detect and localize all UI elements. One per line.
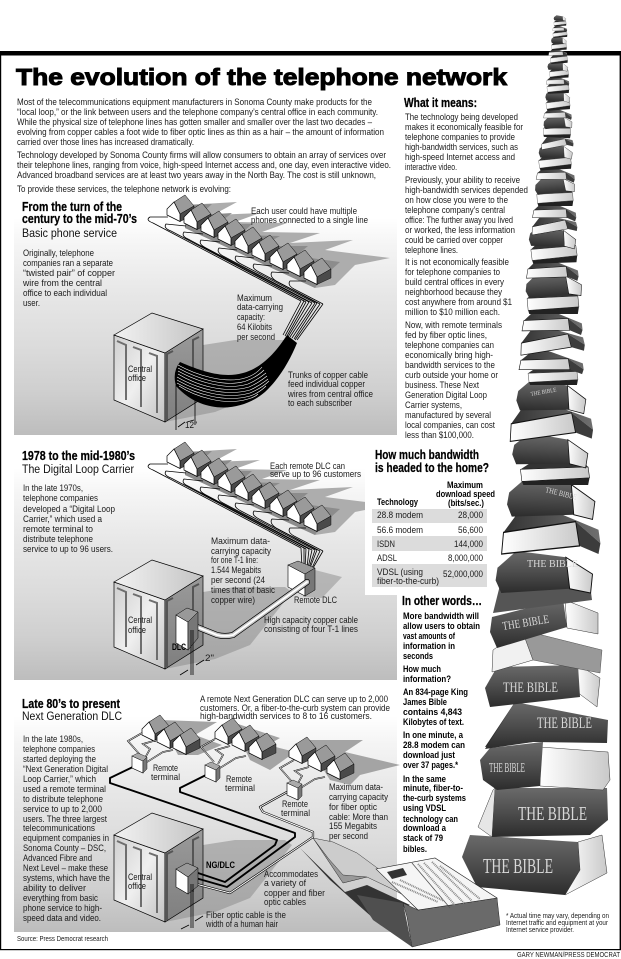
body text: next generation DLC: equipment companies in (23, 832, 109, 843)
label: accommodates: a variety of (264, 877, 306, 888)
body text: in other words: stack of 79 (403, 832, 443, 843)
sidebar body text: Carrier systems, (405, 399, 462, 410)
body text: next generation DLC: service to up to 2,000 (23, 803, 102, 814)
dimension: 12 inches (176, 385, 197, 430)
label: multiple phones (251, 205, 368, 225)
body text: next generation DLC: telephone companies (23, 743, 95, 754)
DLC box (172, 608, 198, 652)
label: central office (128, 363, 152, 383)
label: fiber capacity: for fiber optic (329, 801, 377, 812)
label: each remote DLC (270, 460, 361, 479)
label: high capacity cable: High capacity copper cable (264, 614, 358, 625)
intro text: Most of the telecommunications equipment manufacturers in Sonoma County make products for the (17, 96, 372, 107)
label: maximum capacity: carrying capacity (211, 545, 271, 556)
intro text: their telephone lines, ranging from voice, high-speed Internet access and, one day, even interactive video. (17, 159, 391, 170)
body text: in other words: In one minute, a (403, 729, 464, 740)
house shadows (160, 720, 400, 785)
table heading: is headed to the home? (375, 460, 489, 475)
body text: next generation DLC: Sonoma County – DSC, (23, 842, 106, 853)
body text: basic phone service (22, 247, 115, 308)
panel: next generation DLC (14, 693, 400, 932)
heading: in other words: In other words… (402, 594, 482, 608)
body text: next generation DLC: “Next Generation Digital (23, 763, 108, 774)
sidebar body text: cost anywhere from around $1 (405, 296, 512, 307)
intro text: To provide these services, the telephone network is evolving: (17, 183, 231, 194)
label: fiber capacity: carrying capacity (329, 791, 388, 802)
stack of smaller books (496, 15, 600, 593)
book: sixth (492, 630, 602, 673)
heading: next generation DLC (22, 697, 122, 723)
trunk cable (175, 335, 297, 407)
body text: basic phone service: office to each individual (23, 287, 107, 298)
heading: next generation DLC: Late 80’s to present (22, 697, 121, 711)
book: second: THE BIBLE (518, 803, 587, 825)
body text: next generation DLC: speed data and video. (23, 912, 101, 923)
book: second (478, 788, 608, 837)
footnote: Internet traffic and equipment at your (506, 920, 609, 927)
body text: next generation DLC: phone service to high- (23, 902, 102, 913)
label: remote DLC: Remote DLC (294, 594, 337, 605)
body text: next generation DLC: started deploying the (23, 753, 96, 764)
sidebar body text: makes it economically feasible for (405, 121, 523, 132)
heading: basic phone service: Basic phone service (22, 226, 117, 240)
label: each remote DLC: Each remote DLC can (270, 460, 345, 471)
heading: basic phone service (22, 200, 137, 240)
panel: digital loop carrier (14, 442, 397, 680)
label: fiber capacity: cable: More than (329, 811, 388, 822)
body text: next generation DLC: ability to deliver (23, 882, 86, 893)
column headers (377, 479, 495, 508)
body text: in other words: allow users to obtain (403, 620, 480, 631)
book: bottom (462, 835, 607, 895)
sidebar body text: office: The further away you lived (405, 214, 513, 225)
label: central office: Central (128, 363, 152, 374)
body text: digital loop carrier: In the late 1970s, (23, 482, 83, 493)
label: maximum capacity: per second (237, 331, 275, 342)
building: central office (114, 813, 292, 922)
label: high capacity cable (264, 614, 358, 634)
sidebar body text: It is not economically feasible (405, 256, 509, 267)
body text: in other words: information? (403, 673, 451, 684)
label: remote terminal 3 (281, 798, 310, 818)
body text: in other words: using VDSL (403, 802, 446, 813)
sidebar: what it means (404, 96, 528, 440)
intro text: evolving from copper cables a foot wide to fiber optic lines as thin as a hair – the amount of information (17, 126, 384, 137)
footnote: Internet service provider. (506, 927, 574, 934)
column headers: Technology (377, 496, 419, 507)
table rows: 56.6 modem (377, 524, 423, 535)
wire bundle (148, 464, 323, 568)
body text: digital loop carrier: distribute telephone (23, 533, 93, 544)
sidebar body text: fed by fiber optic lines, (405, 329, 487, 340)
body text: next generation DLC: to distribute telephone (23, 793, 103, 804)
sidebar body text: telephone company’s central (405, 204, 505, 215)
sidebar body text (405, 111, 528, 440)
label: fiber capacity: Maximum data- (329, 781, 383, 792)
table rows: 52,000,000 (443, 568, 483, 579)
table rows: ADSL (377, 552, 397, 563)
panel: basic phone service (14, 195, 397, 435)
label: maximum capacity: data-carrying (237, 301, 283, 312)
body text: in other words: information in (403, 640, 455, 651)
label: fiber capacity (329, 781, 388, 841)
book: fifth: THE BIBLE (503, 680, 558, 696)
table rows: VDSL (using (377, 566, 423, 577)
copper wire bundle (148, 217, 323, 340)
label: remote terminal 2: terminal (225, 782, 255, 793)
sidebar body text: high-bandwidth services depended (405, 184, 528, 195)
label: maximum capacity: capacity: (237, 311, 265, 322)
sidebar body text: build central offices in every (405, 276, 504, 287)
label: fiber width (205, 909, 286, 929)
label: remote terminal 1: terminal (151, 771, 180, 782)
book: eighth (493, 585, 592, 613)
houses (167, 195, 331, 284)
sidebar body text: Now, with remote terminals (405, 319, 502, 330)
intro text: Advanced broadband services are at least two years away in the North Bay. The cost is still unknown, (17, 169, 376, 180)
sidebar body text: telephone lines. (405, 244, 458, 255)
intro text: Technology developed by Sonoma County firms will allow consumers to obtain an array of services over (17, 149, 386, 160)
label: fiber capacity: per second (329, 830, 368, 841)
sidebar body text: Generation Digital Loop (405, 389, 487, 400)
houses: third cluster (289, 737, 354, 780)
label: central office: Central (128, 614, 152, 625)
footnote (506, 913, 609, 934)
label: remote terminal 2: Remote (226, 773, 252, 784)
body text: in other words: More bandwidth will (403, 610, 479, 621)
label: maximum capacity: times that of basic (211, 584, 275, 595)
table rows: fiber-to-the-curb) (377, 575, 439, 586)
intro text: “local loop,” or the link between users and the telephone company’s central office in each community. (17, 106, 378, 117)
house wires (128, 733, 325, 789)
intro text: carried over those lines has increased dramatically. (17, 136, 194, 147)
label: remote NG DLC: A remote Next Generation DLC can serve up to 2,000 (200, 693, 388, 704)
body text: next generation DLC: Advanced Fibre and (23, 852, 92, 863)
table rows (377, 509, 483, 586)
illustration: open bible (300, 838, 500, 947)
label: trunks of copper cable (287, 369, 373, 408)
stack of smaller books: THE BIBLE (527, 558, 578, 570)
heading: basic phone service: From the turn of the (22, 200, 122, 214)
table row bands (372, 509, 487, 587)
label: maximum capacity (211, 535, 275, 605)
DLC box: DLC (172, 641, 186, 652)
sidebar body text: could be carried over copper (405, 234, 503, 245)
book: third (480, 742, 610, 790)
body text: in other words: vast amounts of (403, 630, 456, 641)
sidebar body text: or worked, the less information (405, 224, 515, 235)
table rows: 144,000 (454, 538, 483, 549)
sidebar body text: The technology being developed (405, 111, 518, 122)
label: maximum capacity: copper wire) (211, 594, 255, 605)
body text: next generation DLC (23, 733, 110, 923)
label: remote NG DLC: high-bandwidth services to 8 to 16 customers. (200, 710, 372, 721)
sidebar body text: for telephone companies to (405, 266, 500, 277)
illustration: tower of bibles (462, 15, 610, 895)
body text: digital loop carrier: remote terminal to (23, 523, 93, 534)
body text: next generation DLC: used a remote terminal (23, 783, 106, 794)
label: remote terminal 2 (225, 773, 255, 793)
dimension: 2 inches (180, 630, 214, 675)
body text: in other words: How much (403, 663, 441, 674)
sidebar body text: million to $10 million each. (405, 306, 500, 317)
table rows: 56,600 (458, 524, 483, 535)
sidebar body text: high-bandwidth services, such as (405, 141, 518, 152)
label: trunks of copper cable: feed individual copper (288, 378, 365, 389)
building: central office (114, 560, 292, 669)
sidebar body text: bandwidth services to the (405, 359, 495, 370)
label: high capacity cable: consisting of four T-1 lines (264, 623, 358, 634)
label: maximum capacity (237, 292, 283, 342)
table: bandwidth (365, 445, 495, 595)
label: remote terminal 3: terminal (281, 807, 310, 818)
dimension: 2 inches: 2" (205, 652, 214, 663)
book: third: THE BIBLE (489, 761, 525, 776)
copper cable (192, 582, 307, 636)
body text: in other words: download just (403, 749, 455, 760)
fiber cables (110, 765, 313, 893)
body text: digital loop carrier (23, 482, 115, 554)
body text: in other words (403, 610, 480, 854)
body text: in other words: contains 4,843 (403, 706, 462, 717)
houses: second cluster (215, 718, 276, 760)
table rows: 28,000 (458, 509, 483, 520)
body text: in other words: James Bible (403, 696, 447, 707)
book: fourth: THE BIBLE (537, 715, 592, 732)
label: central office: office (128, 624, 146, 635)
sidebar body text: high-speed Internet access and (405, 151, 515, 162)
label: central office (128, 614, 152, 635)
dimension: 12 inches: 12" (185, 419, 197, 430)
column headers: download speed (436, 488, 495, 499)
remote terminals (132, 753, 302, 800)
body text: next generation DLC: Next Level – make these (23, 862, 108, 873)
label: accommodates: optic cables (264, 896, 306, 907)
title: The evolution of the telephone network (16, 64, 507, 90)
sidebar body text: less than $100,000. (405, 429, 474, 440)
heading: next generation DLC: Next Generation DLC (22, 709, 122, 723)
label: maximum capacity: Maximum data- (211, 535, 270, 546)
body text: basic phone service: “twisted pair” of copper (23, 267, 115, 278)
sidebar body text: business. These Next (405, 379, 479, 390)
NG/DLC box: NG/DLC (206, 859, 235, 870)
label: maximum capacity: 1.544 Megabits (211, 564, 261, 575)
label: central office (128, 871, 152, 891)
label: remote NG DLC (200, 693, 390, 721)
body text: in other words: over 37 pages.* (403, 759, 458, 770)
body text: in other words: the-curb systems (403, 792, 466, 803)
remote DLC (288, 561, 342, 598)
body text: next generation DLC: telecommunications (23, 822, 95, 833)
body text: basic phone service: companies ran a separate (23, 257, 113, 268)
body text: in other words: seconds (403, 650, 433, 661)
body text: digital loop carrier: Carrier,” which used a (23, 513, 103, 524)
label: maximum capacity: for one T-1 line: (211, 554, 258, 565)
label: maximum capacity: per second (24 (211, 574, 265, 585)
sidebar body text: on how close you were to the (405, 194, 508, 205)
sidebar: in other words (402, 594, 482, 854)
label: maximum capacity: 64 Kilobits (237, 321, 272, 332)
houses (167, 442, 331, 532)
body text: next generation DLC: systems, which have the (23, 872, 110, 883)
table rows: 8,000,000 (448, 552, 483, 563)
label: fiber capacity: 155 Megabits (329, 820, 377, 831)
body text: next generation DLC: everything from basic (23, 892, 98, 903)
label: accommodates: Accommodates (264, 868, 318, 879)
label: trunks of copper cable: wires from central office (287, 388, 373, 399)
body text: basic phone service: wire from the central (22, 277, 102, 288)
label: remote terminal 1 (151, 762, 180, 782)
label: remote terminal 3: Remote (282, 798, 308, 809)
body text: next generation DLC: users. The three largest (23, 813, 107, 824)
book: fourth (485, 702, 608, 749)
body text: in other words: minute, fiber-to- (403, 782, 463, 793)
heading: basic phone service: century to the mid-70’s (22, 212, 137, 226)
heading: what it means: What it means: (404, 96, 477, 110)
body text: in other words: technology can (403, 813, 458, 824)
body text: in other words: 28.8 modem can (403, 739, 465, 750)
body text: in other words: download a (403, 822, 447, 833)
body text: in other words: In the same (403, 773, 446, 784)
body text: digital loop carrier: service to up to 96 users. (23, 543, 113, 554)
column headers: (bits/sec.) (448, 497, 484, 508)
body text: next generation DLC: Loop Carrier,” which (23, 773, 96, 784)
label: trunks of copper cable: Trunks of copper cable (288, 369, 368, 380)
table rows: 28.8 modem (377, 509, 423, 520)
label: accommodates (264, 868, 325, 907)
sidebar body text: Previously, your ability to receive (405, 174, 520, 185)
sidebar body text: telephone companies to provide (405, 131, 515, 142)
heading: digital loop carrier: 1978 to the mid-1980’s (22, 449, 135, 463)
label: fiber width: Fiber optic cable is the (206, 909, 286, 920)
body text: in other words: bibles. (403, 843, 427, 854)
table heading: How much bandwidth (375, 447, 479, 462)
sidebar body text: interactive video. (405, 161, 457, 172)
body text: next generation DLC: In the late 1980s, (23, 733, 83, 744)
house shadows (185, 449, 390, 535)
book: fifth (485, 665, 600, 707)
body text: in other words: An 834-page King (403, 686, 468, 697)
label: fiber width: width of a human hair (205, 918, 278, 929)
body text: in other words: Kilobytes of text. (403, 716, 464, 727)
label: accommodates: copper and fiber (264, 887, 325, 898)
dimension: fiber width (181, 884, 203, 929)
heading: digital loop carrier (22, 449, 135, 476)
book: seventh (490, 599, 598, 648)
NG/DLC box (176, 859, 235, 894)
sidebar body text: economically bring high- (405, 349, 493, 360)
sidebar body text: local companies, can cost (405, 419, 495, 430)
label: trunks of copper cable: to each subscriber (288, 397, 352, 408)
body text: digital loop carrier: telephone companies (23, 492, 98, 503)
label: central office: Central (128, 871, 152, 882)
book: seventh: THE BIBLE (501, 612, 550, 633)
house shadows (185, 202, 390, 288)
body text: digital loop carrier: developed a “Digital Loop (23, 503, 115, 514)
label: each remote DLC: serve up to 96 customers (270, 468, 361, 479)
table heading (375, 447, 489, 475)
sidebar body text: curb outside your home or (405, 369, 498, 380)
stack of smaller books: THE BIBLE (545, 485, 578, 502)
label: multiple phones: phones connected to a single line (251, 214, 368, 225)
body text: basic phone service: Originally, telephone (23, 247, 94, 258)
source: Source: Press Democrat research (17, 934, 108, 943)
heading: digital loop carrier: The Digital Loop Carrier (22, 462, 134, 476)
stack of smaller books: THE BIBLE (530, 387, 557, 398)
sidebar body text: manufactured by several (405, 409, 491, 420)
label: remote terminal 1: Remote (153, 762, 178, 773)
sidebar body text: telephone companies can (405, 339, 494, 350)
table rows: ISDN (377, 538, 395, 549)
label: multiple phones: Each user could have multiple (251, 205, 357, 216)
building: central office (114, 313, 292, 422)
label: remote NG DLC: customers. Or, a fiber-to-the-curb system can provide (200, 702, 390, 713)
column headers: Maximum (447, 479, 483, 490)
label: central office: office (128, 372, 146, 383)
body text: basic phone service: user. (23, 297, 40, 308)
intro text (17, 96, 391, 194)
footnote: * Actual time may vary, depending on (506, 913, 609, 920)
intro text: While the physical size of telephone lines has gotten smaller and smaller over the last two decades – (17, 116, 373, 127)
houses: first cluster (142, 715, 200, 754)
label: central office: office (128, 880, 146, 891)
sidebar body text: neighborhood because they (405, 286, 502, 297)
label: maximum capacity: Maximum (237, 292, 272, 303)
book: bottom: THE BIBLE (483, 854, 553, 878)
